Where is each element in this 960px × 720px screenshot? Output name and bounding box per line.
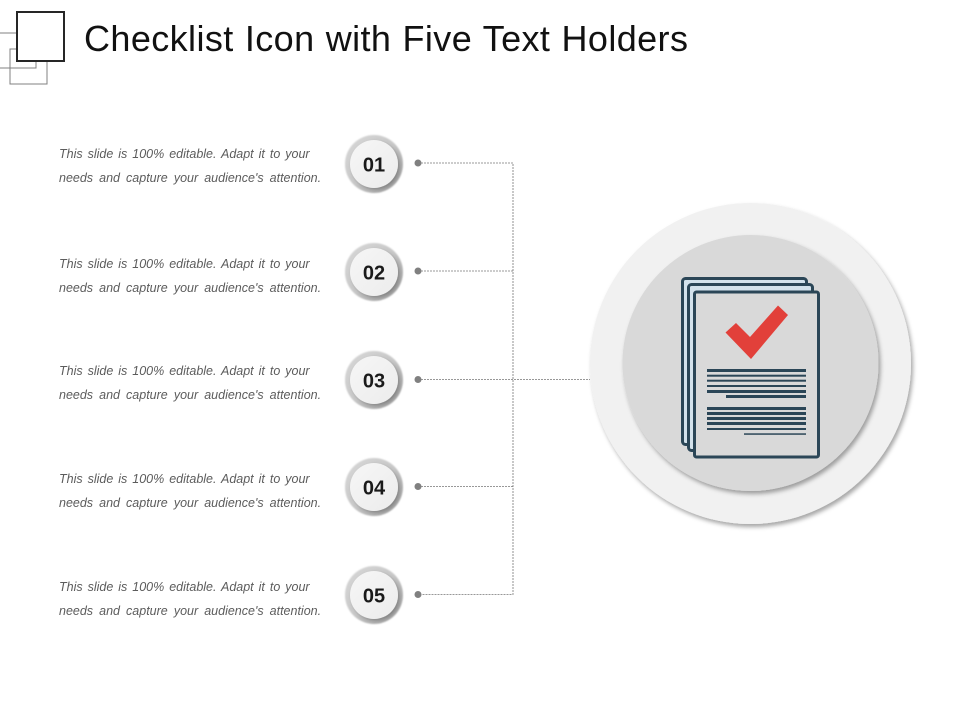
number badge 04: 04 <box>363 478 386 500</box>
connector dot 04 <box>414 483 422 490</box>
text block 01: This slide is 100% editable. Adapt it to your <box>59 147 310 161</box>
icon: title squares decoration <box>0 12 64 84</box>
text block 02: needs and capture your audience's attention. <box>59 281 321 295</box>
icon: stacked documents with check mark <box>682 278 818 457</box>
back pages <box>682 278 812 450</box>
connector dot 05 <box>414 591 422 598</box>
connector dot 01 <box>414 160 422 166</box>
text block 02: This slide is 100% editable. Adapt it to your <box>59 257 310 271</box>
number badge 05 <box>345 566 403 624</box>
check mark <box>726 306 788 359</box>
inner circle <box>622 235 878 491</box>
number badge 01 <box>345 135 403 193</box>
item 03 <box>59 351 422 409</box>
text block 04 <box>59 472 321 510</box>
connector dot 03 <box>414 376 422 383</box>
outer circle <box>590 203 911 524</box>
number badge 01: 01 <box>363 154 385 176</box>
number badge 03: 03 <box>363 370 385 392</box>
number badge 05: 05 <box>363 586 385 608</box>
central medallion <box>590 203 911 524</box>
title: Checklist Icon with Five Text Holders <box>84 18 688 59</box>
text lines <box>707 369 806 435</box>
text block 05: needs and capture your audience's attention. <box>59 604 321 618</box>
item 05 <box>59 566 422 624</box>
text block 03: needs and capture your audience's attention. <box>59 388 321 402</box>
text block 04: This slide is 100% editable. Adapt it to your <box>59 472 310 486</box>
connector dot 02 <box>414 268 422 274</box>
text block 05: This slide is 100% editable. Adapt it to your <box>59 580 310 594</box>
number badge 02 <box>345 243 403 301</box>
number badge 02: 02 <box>363 262 385 284</box>
item 04 <box>59 458 422 516</box>
text block 01 <box>59 147 321 185</box>
text block 03 <box>59 364 321 402</box>
item 02 <box>59 243 422 301</box>
front page <box>694 292 818 457</box>
text block 02 <box>59 257 321 295</box>
item 01 <box>59 135 422 193</box>
number badge 03 <box>345 351 403 409</box>
text block 01: needs and capture your audience's attention. <box>59 171 321 185</box>
text block 04: needs and capture your audience's attention. <box>59 496 321 510</box>
number badge 04 <box>345 458 403 516</box>
text block 05 <box>59 580 321 618</box>
text block 03: This slide is 100% editable. Adapt it to your <box>59 364 310 378</box>
connector lines <box>418 163 590 594</box>
